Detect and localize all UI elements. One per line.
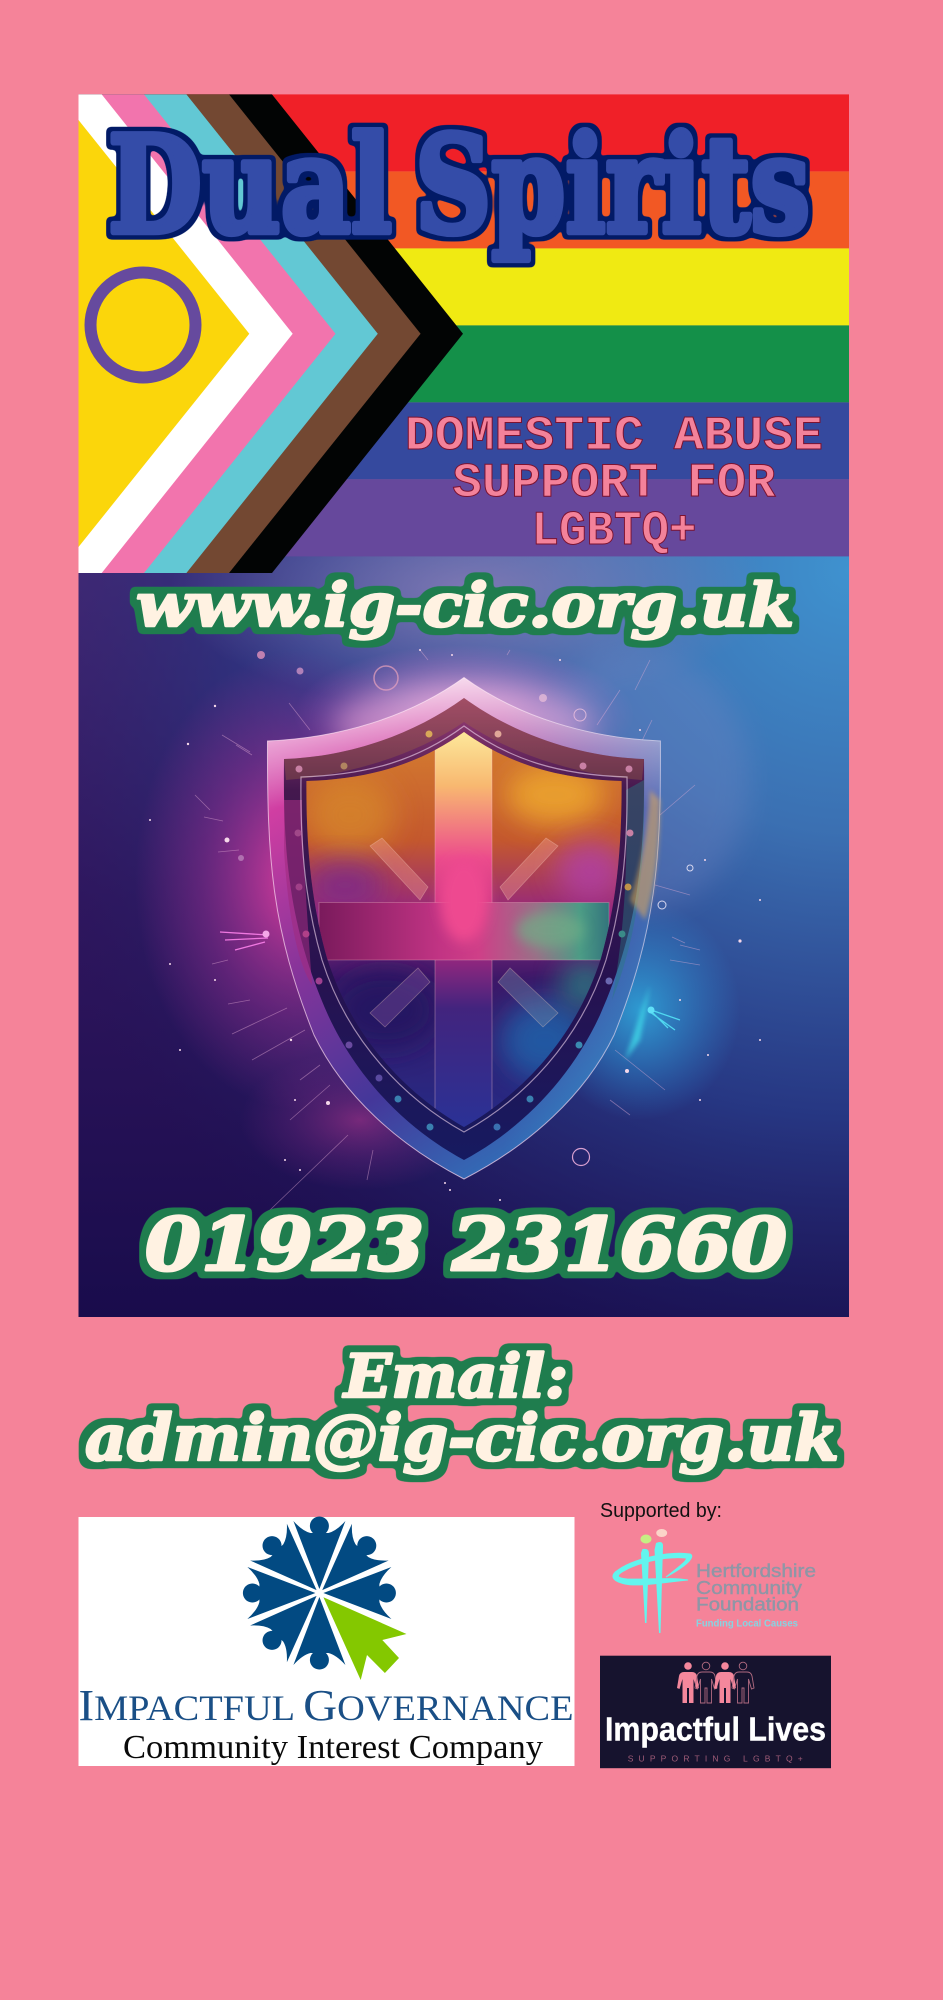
shield dark band	[284, 698, 644, 1160]
poster	[78, 94, 849, 1768]
people icon	[677, 1662, 754, 1703]
panel: progress pride flag	[78, 94, 849, 573]
HCF name: Community	[696, 1578, 802, 1598]
logo: Impactful Lives	[600, 1656, 831, 1768]
strapline: SUPPORTING LGBTQ+	[628, 1754, 803, 1764]
intersex circle	[90, 272, 196, 378]
subtitle: SUPPORT FOR	[452, 457, 776, 511]
sparks and rays	[149, 649, 761, 1210]
shield trim line	[301, 726, 627, 1132]
chevrons	[78, 94, 463, 573]
green cursor arrow	[323, 1597, 406, 1680]
shield outer rim	[267, 678, 660, 1179]
panel: shield artwork	[78, 556, 849, 1317]
subtitle	[405, 410, 823, 559]
company name: IMPACTFUL GOVERNANCE	[78, 1681, 574, 1730]
diagonal bars	[370, 838, 558, 1027]
phone number: 01923 231660	[145, 1202, 787, 1288]
email: Email:	[342, 1342, 568, 1412]
sheen	[630, 790, 660, 920]
shield inner field	[300, 725, 630, 1135]
HCF name	[696, 1561, 816, 1615]
HCF icon	[613, 1529, 692, 1633]
supported by: Supported by:	[600, 1500, 722, 1522]
shield	[267, 678, 660, 1179]
logo: Hertfordshire Community Foundation	[613, 1529, 816, 1633]
HCF name: Hertfordshire	[696, 1561, 816, 1581]
website: www.ig-cic.org.uk	[136, 571, 794, 641]
title	[108, 106, 810, 264]
rainbow stripes	[78, 94, 849, 556]
emblem	[243, 1516, 406, 1680]
email: admin@ig-cic.org.uk	[85, 1401, 839, 1476]
title: Dual	[108, 106, 392, 264]
email	[85, 1342, 839, 1476]
subtitle: DOMESTIC ABUSE	[405, 410, 823, 464]
name: Impactful Lives	[605, 1711, 826, 1748]
subtitle: LGBTQ+	[532, 505, 696, 559]
cross	[319, 725, 609, 1130]
company type: Community Interest Company	[123, 1729, 543, 1766]
title: Spirits	[415, 106, 810, 264]
HCF name: Foundation	[696, 1595, 799, 1615]
HCF strapline: Funding Local Causes	[696, 1618, 798, 1630]
rivets	[294, 730, 634, 1130]
logo: Impactful Governance	[78, 1516, 574, 1766]
